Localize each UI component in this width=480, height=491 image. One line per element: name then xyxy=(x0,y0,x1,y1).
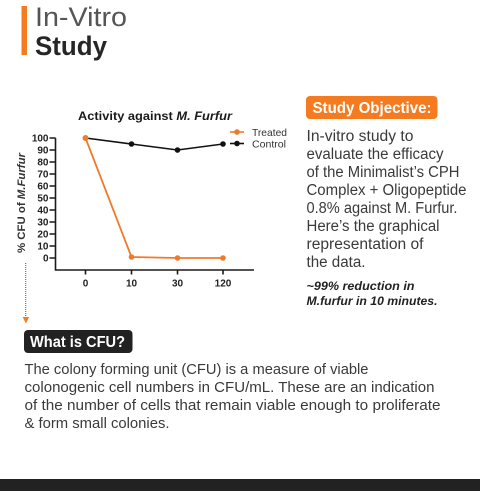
y axis numbers: 10 xyxy=(37,242,49,252)
title xyxy=(22,2,127,61)
x axis numbers: 30 xyxy=(172,278,183,290)
footer bar xyxy=(0,479,480,491)
y axis numbers: 40 xyxy=(37,206,49,216)
CFU text: colonogenic cell numbers in CFU/mL. These are an indication xyxy=(24,379,434,396)
key result xyxy=(306,279,438,308)
y axis numbers: 60 xyxy=(37,182,49,192)
CFU text xyxy=(24,361,441,432)
y axis numbers xyxy=(32,134,49,264)
title: In-Vitro xyxy=(35,2,127,32)
CFU text: of the number of cells that remain viable enough to proliferate xyxy=(24,397,441,414)
objective text: Here’s the graphical xyxy=(306,218,440,235)
control series xyxy=(86,138,226,153)
y axis numbers: 20 xyxy=(37,230,49,240)
y axis numbers: 80 xyxy=(37,158,49,168)
y axis numbers: 0 xyxy=(43,254,49,264)
x axis numbers: 10 xyxy=(126,278,137,290)
arrow: dotted down xyxy=(23,263,29,324)
y axis numbers: 100 xyxy=(32,134,49,144)
y axis numbers: 50 xyxy=(37,194,49,204)
x axis numbers xyxy=(83,278,232,290)
title: Study xyxy=(35,31,107,61)
CFU heading: What is CFU? xyxy=(30,334,125,351)
objective heading: Study Objective: xyxy=(312,100,432,117)
legend: Control xyxy=(252,138,286,150)
legend: Treated xyxy=(252,127,287,139)
treated series xyxy=(82,135,226,261)
y axis numbers: 70 xyxy=(37,170,49,180)
y axis label: % CFU of M.Furfur xyxy=(16,152,28,253)
x axis xyxy=(55,270,254,274)
y axis xyxy=(50,138,56,270)
line chart xyxy=(16,109,287,290)
objective text: representation of xyxy=(306,236,424,253)
CFU text: & form small colonies. xyxy=(24,415,170,432)
objective text: evaluate the efficacy xyxy=(306,146,444,163)
y axis numbers: 90 xyxy=(37,146,49,156)
CFU text: The colony forming unit (CFU) is a measure of viable xyxy=(24,361,368,378)
legend xyxy=(230,127,287,150)
objective text: 0.8% against M. Furfur. xyxy=(306,200,458,217)
x axis numbers: 120 xyxy=(215,278,232,290)
objective text: of the Minimalist’s CPH xyxy=(306,164,460,181)
objective text: Complex + Oligopeptide xyxy=(306,182,466,199)
objective text: In-vitro study to xyxy=(306,128,414,145)
CFU heading xyxy=(24,330,132,353)
chart title: Activity against M. Furfur xyxy=(78,109,233,123)
objective text: the data. xyxy=(306,254,366,271)
objective text xyxy=(306,128,466,271)
key result: ~99% reduction in xyxy=(306,279,414,293)
objective heading xyxy=(306,96,438,119)
panel: what is CFU xyxy=(24,330,441,432)
y axis numbers: 30 xyxy=(37,218,49,228)
x axis numbers: 0 xyxy=(83,278,89,290)
panel: study objective xyxy=(306,96,466,308)
key result: M.furfur in 10 minutes. xyxy=(306,294,438,308)
